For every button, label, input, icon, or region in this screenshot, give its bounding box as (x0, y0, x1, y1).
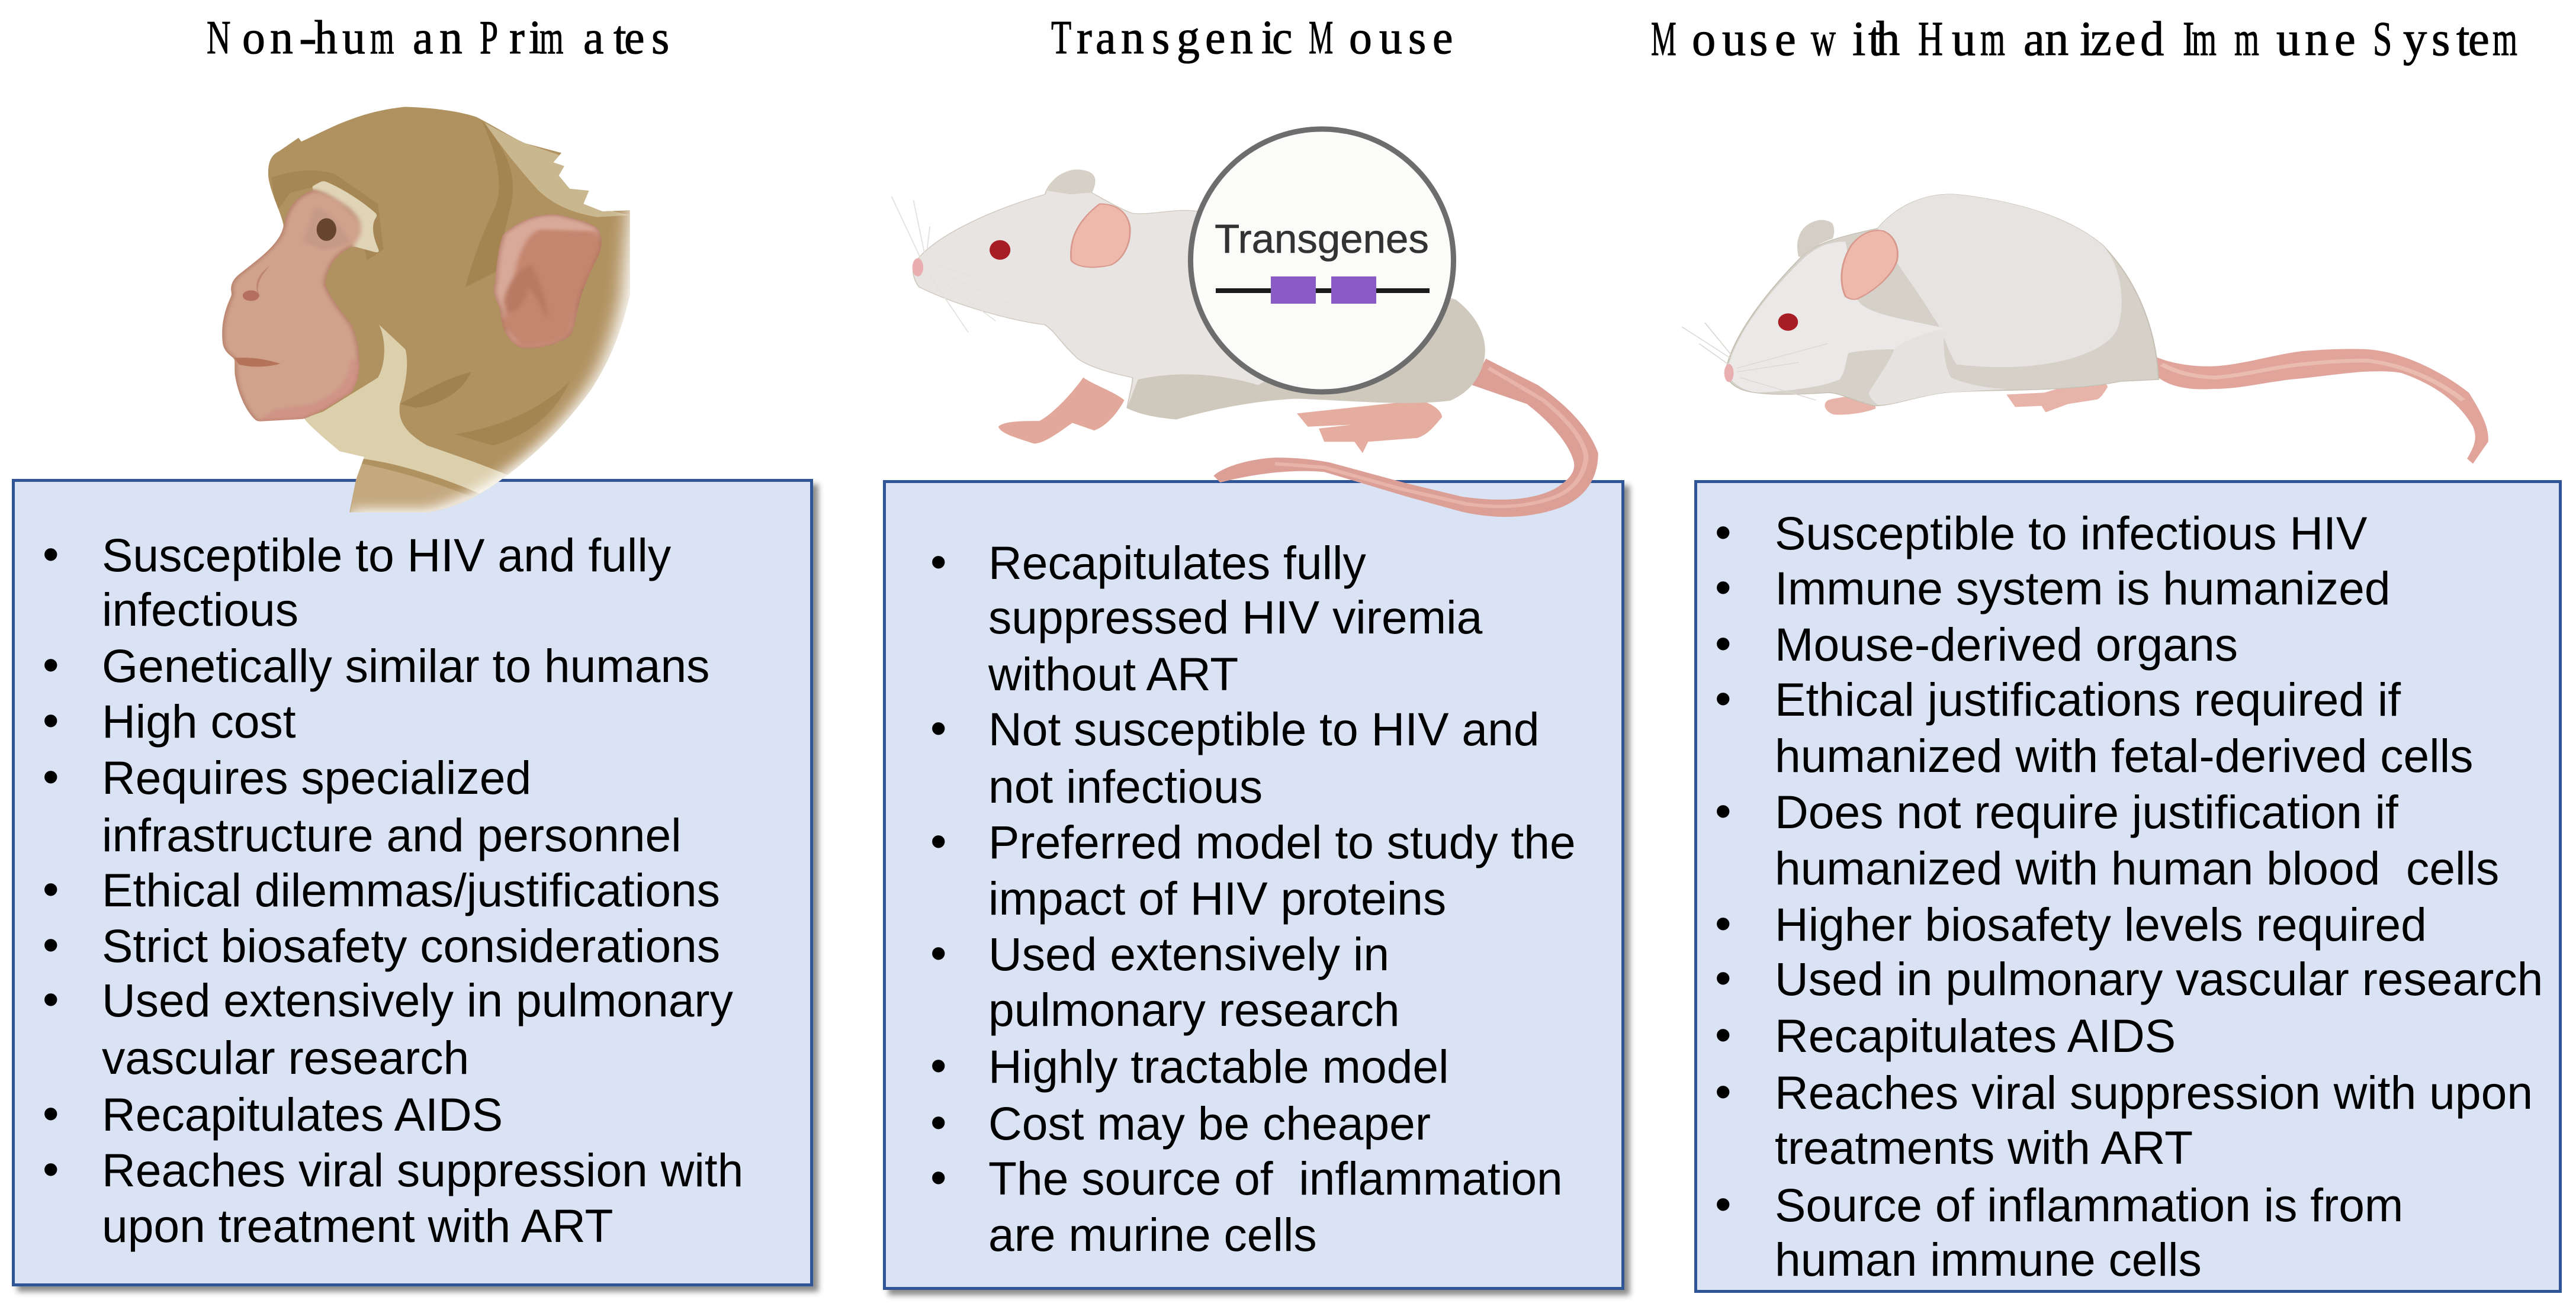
bullet: pulmonary vascular research: vascular research (102, 1032, 469, 1084)
bullet: specialized infrastructure: Requires specialized (102, 752, 531, 804)
bullet: pulmonary vascular research: • (1715, 952, 1732, 1004)
title: Non-human Primates (207, 12, 669, 64)
eye (317, 218, 336, 241)
whiskers (1682, 323, 1828, 400)
title: Mouse with Humanized Immune System: i (2080, 11, 2093, 66)
bullet: biosafety: • (43, 919, 59, 971)
title: Mouse with Humanized Immune System: H (1918, 11, 1943, 66)
bullet: source of inflammation: • (930, 1151, 947, 1203)
bullet: viral suppression: Reaches viral suppression with upon (1775, 1067, 2533, 1119)
back ear (1797, 220, 1834, 257)
title: Transgenic Mouse: e (1205, 12, 1225, 64)
forearm (1869, 329, 2009, 405)
title: Mouse with Humanized Immune System: s (1749, 11, 1768, 66)
title: Non-human Primates: a (413, 12, 433, 64)
bullet: ethical justifications: humanized with fetal-derived cells (1775, 730, 2473, 782)
fade edge (349, 210, 630, 513)
light fur at nape (485, 123, 630, 217)
bullet: source of inflammation: human immune cells (1775, 1234, 2202, 1286)
bullet: ethical justifications (1715, 672, 2473, 782)
bullet: source of inflammation: • (1715, 1178, 1732, 1230)
title: Transgenic Mouse: r (1077, 12, 1092, 64)
belly shade (1127, 294, 1485, 419)
title: Mouse with Humanized Immune System: y (2403, 11, 2427, 66)
bullet: ethical justifications: Ethical justifications required if (1775, 674, 2401, 726)
title: Transgenic Mouse: s (1408, 12, 1426, 64)
bullet: organs: Mouse-derived organs (1775, 619, 2238, 671)
bullet: suppressed viremia (930, 536, 1483, 700)
title: Transgenic Mouse: u (1379, 12, 1402, 64)
gene track (1216, 276, 1430, 304)
eye (1778, 313, 1798, 331)
bullet: recapitulates AIDS: • (43, 1087, 59, 1140)
title: Mouse with Humanized Immune System: e (2115, 11, 2136, 66)
tail (1213, 359, 1598, 517)
bullet: not susceptible: Not susceptible to HIV and (988, 703, 1540, 755)
bullet: viral suppression: • (43, 1143, 59, 1195)
bullet: genetically similar: Genetically similar to humans (102, 640, 709, 692)
bullet: susceptible to HIV (43, 528, 671, 636)
title: Transgenic Mouse: g (1177, 12, 1200, 64)
bullet: high cost: High cost (102, 696, 296, 748)
title: Transgenic Mouse: c (1272, 12, 1292, 64)
bullet: suppressed viremia: Recapitulates fully (988, 537, 1366, 589)
bullet: preferred model: Preferred model to study the (988, 816, 1576, 868)
title: Transgenic Mouse: M (1309, 12, 1333, 64)
brow fur shading (271, 170, 384, 260)
title: Transgenic Mouse: i (1261, 12, 1274, 64)
title: Mouse with Humanized Immune System: S (2373, 11, 2392, 66)
title: Non-human Primates: - (299, 12, 317, 64)
bullet: no justification (1715, 785, 2499, 894)
nose (913, 258, 923, 276)
title: Mouse with Humanized Immune System: M (1651, 11, 1676, 66)
title: Mouse with Humanized Immune System: n (2305, 11, 2328, 66)
bullet: ethical dilemmas: Ethical dilemmas/justifications (102, 864, 720, 916)
bullet: cost: Cost may be cheaper (988, 1098, 1431, 1150)
whiskers (892, 197, 1023, 332)
title: Mouse with Humanized Immune System: m (2493, 11, 2517, 66)
bullet: recapitulates AIDS (1715, 1007, 2556, 1063)
bullet: not susceptible: • (930, 702, 947, 754)
bullet: susceptible: Susceptible to infectious HIV (1775, 507, 2367, 559)
title: Non-human Primates: m (370, 12, 394, 64)
bullet: pulmonary vascular research: • (43, 973, 59, 1025)
eye (990, 240, 1010, 260)
body (913, 170, 1485, 419)
bullet: suppressed viremia: • (930, 536, 947, 588)
title: Transgenic Mouse: o (1349, 12, 1372, 64)
bullet: no justification: humanized with human blood cells (1775, 842, 2499, 894)
bullet: viral suppression: upon treatment with ART (102, 1200, 614, 1252)
icon: transgenic mouse with tail (888, 118, 1344, 521)
bullet: high cost: • (43, 694, 59, 746)
bullet: susceptible to HIV: Susceptible to HIV and fully (102, 529, 671, 581)
bullet: organs: • (1715, 617, 1732, 670)
title: Mouse with Humanized Immune System: w (1811, 11, 1836, 66)
bullet: no justification: • (1715, 785, 1732, 837)
bullet: specialized infrastructure: • (43, 751, 59, 803)
title: Non-human Primates: m (539, 12, 563, 64)
bullet: genetically similar: • (43, 639, 59, 691)
title: Non-human Primates: s (651, 12, 669, 64)
ear (494, 215, 601, 348)
title: Mouse with Humanized Immune System: h (1876, 11, 1900, 66)
bullet: recapitulates AIDS: Recapitulates AIDS (102, 1089, 503, 1141)
bullet: viral suppression: • (1715, 1066, 1732, 1118)
bullet: immune system: • (1715, 561, 1732, 613)
bullet: preferred model: impact of HIV proteins (988, 873, 1446, 925)
title: Mouse with Humanized Immune System: u (1952, 11, 1976, 66)
bullet: pulmonary research (930, 927, 1400, 1036)
bullet: specialized infrastructure: infrastructure and personnel (102, 809, 682, 861)
title: Mouse with Humanized Immune System: m (2192, 11, 2217, 66)
title: Mouse with Humanized Immune System: m (2234, 11, 2259, 66)
bullet: specialized infrastructure (43, 751, 682, 861)
bullet: pulmonary research: • (930, 927, 947, 979)
title: Mouse with Humanized Immune System: n (2045, 11, 2068, 66)
title: Non-human Primates: N (207, 12, 230, 64)
cream throat (304, 325, 509, 495)
bullet: viral suppression (43, 1143, 743, 1252)
title: Mouse with Humanized Immune System: u (1722, 11, 1746, 66)
bullet: source of inflammation (1715, 1176, 2556, 1286)
panel: non-human primates characteristics (12, 479, 813, 1286)
bullet: pulmonary research: pulmonary research (988, 984, 1400, 1036)
brow (310, 181, 381, 254)
ear (1071, 204, 1130, 267)
title: Mouse with Humanized Immune System: i (1852, 11, 1865, 66)
title: Mouse with Humanized Immune System: I (2183, 11, 2194, 66)
bullet: source of inflammation: are murine cells (988, 1209, 1317, 1261)
title: Non-human Primates: P (480, 12, 498, 64)
title: Transgenic Mouse: n (1230, 12, 1253, 64)
nose and mouth (256, 266, 269, 298)
bullet: susceptible to HIV: • (43, 528, 59, 580)
bullet: ethical justifications: • (1715, 672, 1732, 725)
body (1726, 194, 2159, 406)
bullet: not susceptible (930, 702, 1540, 813)
icon: mouse with humanized immune system (1670, 184, 2517, 474)
nose (1724, 364, 1734, 382)
legs (998, 378, 1125, 443)
bullet: recapitulates AIDS: Recapitulates AIDS (1775, 1010, 2176, 1062)
bullet: pulmonary vascular research: Used extensively in pulmonary (102, 974, 733, 1026)
bullet: viral suppression: Reaches viral suppression with (102, 1144, 743, 1196)
title: Non-human Primates: o (242, 12, 265, 64)
title: Mouse with Humanized Immune System: o (1692, 11, 1716, 66)
title: Mouse with Humanized Immune System: m (1980, 11, 2005, 66)
title: Mouse with Humanized Immune System: t (1868, 11, 1881, 66)
bullet: preferred model (930, 815, 1576, 925)
face skin (223, 191, 368, 421)
bullet: viral suppression: treatments with ART (1775, 1122, 2193, 1174)
bullet: cost: • (930, 1096, 947, 1148)
bullet: tractable model: • (930, 1040, 947, 1092)
back highlight (1878, 194, 2122, 367)
eye socket (303, 207, 351, 250)
title: Transgenic Mouse (1051, 12, 1453, 64)
head (1727, 242, 1945, 392)
panel: transgenic mouse characteristics (883, 480, 1624, 1290)
bullet: biosafety levels: Higher biosafety levels required (1775, 899, 2427, 951)
title: Mouse with Humanized Immune System: e (2468, 11, 2490, 66)
bullet: no justification: Does not require justification if (1775, 786, 2398, 838)
title: Mouse with Humanized Immune System: u (2276, 11, 2300, 66)
bullet: pulmonary vascular research (43, 973, 733, 1084)
title: Mouse with Humanized Immune System: e (2334, 11, 2356, 66)
bullet: ethical dilemmas: • (43, 863, 59, 915)
title: Transgenic Mouse: n (1121, 12, 1144, 64)
title: Transgenic Mouse: a (1096, 12, 1116, 64)
bullet: suppressed viremia: suppressed HIV viremia (988, 591, 1482, 643)
bullet: pulmonary research: Used extensively in (988, 928, 1389, 980)
title: Transgenic Mouse: e (1432, 12, 1453, 64)
bullet: viral suppression (1715, 1064, 2556, 1174)
bullet: not susceptible: not infectious (988, 761, 1263, 813)
paws (1825, 392, 1876, 415)
title: Non-human Primates: t (614, 12, 627, 64)
bullet: immune system: Immune system is humanized (1775, 562, 2391, 614)
title: Non-human Primates: n (270, 12, 293, 64)
title: Non-human Primates: i (529, 12, 542, 64)
title: Non-human Primates: n (439, 12, 462, 64)
title: Non-human Primates: a (583, 12, 603, 64)
bullet: biosafety: Strict biosafety considerations (102, 920, 720, 972)
title: Mouse with Humanized Immune System: e (1775, 11, 1796, 66)
bullet: preferred model: • (930, 815, 947, 867)
title: Transgenic Mouse: s (1152, 12, 1170, 64)
bullet: source of inflammation (930, 1151, 1563, 1261)
bullet: source of inflammation: Source of inflammation is from (1775, 1179, 2403, 1231)
bullet: tractable model: Highly tractable model (988, 1041, 1449, 1093)
bullet: pulmonary vascular research: Used in pulmonary vascular research (1775, 953, 2543, 1005)
title: Non-human Primates: h (314, 12, 338, 64)
bullet: suppressed viremia: without ART (988, 648, 1238, 700)
title: Non-human Primates: u (342, 12, 365, 64)
icon: transgenes inset circle (1184, 124, 1463, 397)
panel: humanized immune system mouse characteristics (1694, 480, 2562, 1293)
title: Mouse with Humanized Immune System: d (2140, 11, 2164, 66)
icon: rhesus macaque head (222, 107, 630, 513)
bullet: recapitulates AIDS: • (1715, 1009, 1732, 1061)
title: Mouse with Humanized Immune System: z (2090, 11, 2112, 66)
title: Mouse with Humanized Immune System (1651, 11, 2517, 66)
bullet: biosafety levels: • (1715, 897, 1732, 950)
title: Non-human Primates: r (509, 12, 525, 64)
ear (1842, 230, 1897, 300)
title: Mouse with Humanized Immune System: t (2456, 11, 2469, 66)
bullet: source of inflammation: The source of inflammation (988, 1153, 1563, 1205)
bullet: susceptible to HIV: infectious (102, 584, 298, 636)
tail (2154, 349, 2488, 464)
bullet: susceptible: • (1715, 506, 1732, 558)
title: Transgenic Mouse: T (1051, 12, 1071, 64)
title: Non-human Primates: e (624, 12, 644, 64)
title: Mouse with Humanized Immune System: a (2023, 11, 2045, 66)
label: Transgenes: Transgenes (1215, 216, 1429, 262)
title: Mouse with Humanized Immune System: s (2432, 11, 2450, 66)
